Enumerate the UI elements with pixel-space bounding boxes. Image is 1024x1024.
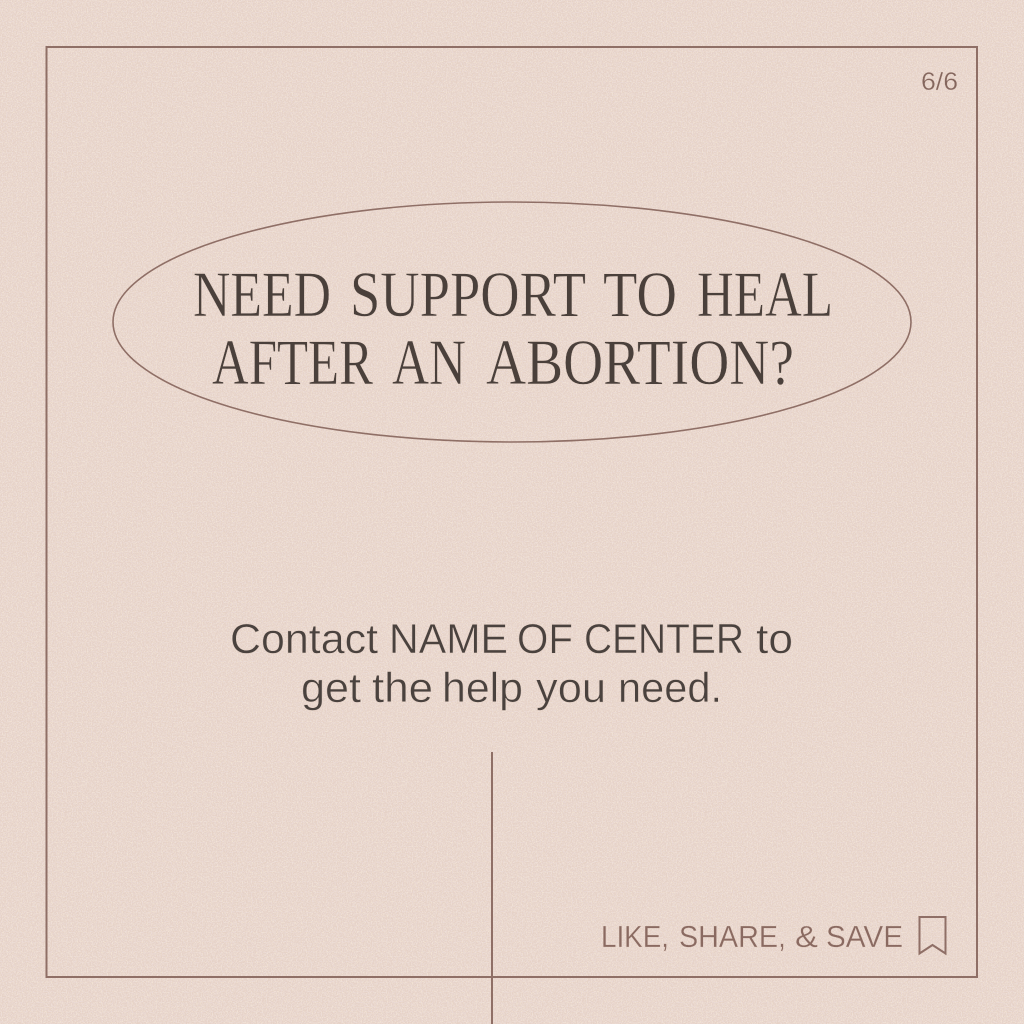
call to action [601, 919, 903, 954]
contact message: Contact [230, 615, 378, 662]
heading: SUPPORT [350, 259, 586, 331]
heading: AFTER [212, 327, 374, 399]
heading: HEAL [697, 259, 833, 331]
icon: bookmark [920, 917, 946, 954]
call to action: & [795, 919, 818, 954]
vertical connector line [491, 752, 493, 1024]
heading [193, 259, 833, 399]
contact message: OF [517, 615, 573, 662]
call to action: LIKE, [601, 919, 669, 954]
contact message: NAME [389, 615, 508, 662]
contact message: CENTER [584, 615, 744, 662]
heading oval [113, 202, 911, 442]
contact message [230, 615, 793, 711]
contact message: need. [618, 664, 722, 711]
contact message: you [536, 664, 606, 711]
call to action: SAVE [826, 919, 903, 954]
heading: AN [392, 327, 466, 399]
call to action: SHARE, [679, 919, 786, 954]
heading: ABORTION? [486, 327, 794, 399]
heading: NEED [193, 259, 331, 331]
contact message: to [756, 615, 793, 662]
heading: TO [603, 259, 677, 331]
contact message: the [372, 664, 433, 711]
contact message: get [301, 664, 361, 711]
page number: 6/6 [921, 68, 958, 96]
contact message: help [442, 664, 523, 711]
